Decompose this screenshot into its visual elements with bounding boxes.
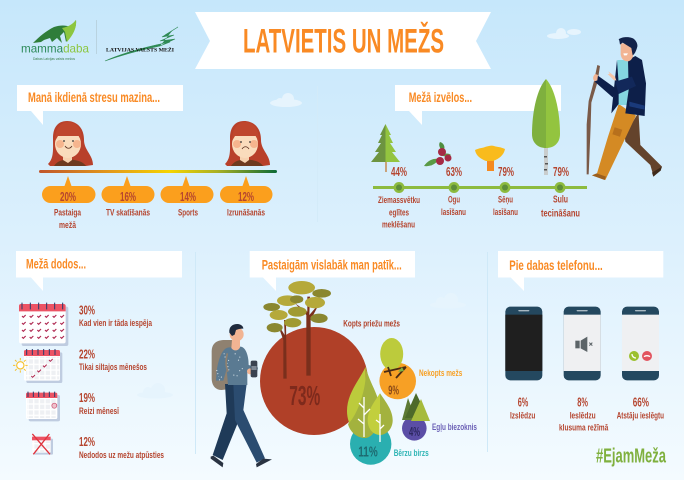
item: izrunāšanās: 12%: [238, 189, 254, 204]
stress scale line: [39, 170, 277, 173]
bubble chart: unmanaged forest 9%: [379, 338, 462, 399]
value: 79% Sēņu lasīšanu: lasīšanu: [493, 207, 518, 218]
item: tv skatīšanās: TV skatīšanās: [106, 208, 150, 219]
logo: Latvijas valsts meži: LATVIJAS VALSTS MEŽI: [106, 48, 174, 54]
bubble chart: spruce thicket 4%: Egļu biezoknis: [432, 422, 477, 433]
value: 79% Sulu tecināšanu: 79%: [553, 164, 569, 179]
stat: 30%: 30%: [79, 303, 95, 318]
illustration: hiker with backpack: [211, 324, 272, 467]
value: 44% Ziemassvētku eglītes meklēšanu: 44%: [391, 164, 407, 179]
stat: 30%: [79, 303, 152, 329]
icon: christmas tree: [371, 124, 400, 172]
item: pastaiga mežā: 20%: [60, 189, 76, 204]
item: izrunāšanās: [220, 176, 272, 219]
stat: 19%: 19%: [79, 390, 95, 405]
panel: stress: [17, 85, 277, 231]
value: 44% Ziemassvētku eglītes meklēšanu: eglītes: [389, 208, 409, 219]
heading bubble: phone: [498, 251, 663, 291]
icon: calendar with sun: [13, 349, 62, 383]
bubble chart: pine forest 73%: [260, 281, 400, 435]
stat: 6%: Izslēdzu: [510, 411, 535, 422]
icon: happy woman: [48, 121, 93, 166]
stat: 8%: 8%: [577, 395, 588, 410]
logo: mammadaba: Dabas Latvijas valsts mežos: [33, 57, 75, 61]
logo: mammadaba: [21, 20, 89, 61]
logo: mammadaba: mammadaba: [21, 42, 89, 56]
value: 44% Ziemassvētku eglītes meklēšanu: meklēšanu: [382, 220, 415, 230]
value: 63% Ogu lasīšanu: lasīšanu: [441, 207, 466, 218]
value: 63% Ogu lasīšanu: [441, 164, 466, 218]
stat: 19%: Reizi mēnesī: [79, 406, 119, 417]
item: pastaiga mežā: Pastaiga: [54, 208, 81, 219]
icon: crossed calendar: [32, 434, 53, 455]
item: sports: 14%: [180, 189, 196, 204]
bubble chart: pine forest 73%: Kopts priežu mežs: [343, 319, 400, 330]
panel: favourite forests: [250, 251, 477, 465]
icon: calendar with one mark: [26, 392, 60, 421]
stat: 22%: 22%: [79, 347, 95, 362]
stat: 6%: [510, 395, 535, 422]
stat: 6%: 6%: [518, 395, 529, 410]
item: tv skatīšanās: 16%: [120, 189, 136, 204]
item: pastaiga mežā: [42, 176, 96, 231]
cloud: centre: [430, 293, 466, 308]
stat: 8%: Ieslēdzu: [570, 411, 596, 422]
heading bubble: how often: Mežā dodos...: [26, 256, 86, 272]
icon: calendar full of checks: [19, 303, 68, 346]
cloud: top right: [547, 28, 581, 39]
icon: birch tree: [532, 79, 560, 175]
icon: phone off: [505, 307, 542, 380]
bubble chart: unmanaged forest 9%: Nekopts mežs: [419, 368, 462, 379]
value: 63% Ogu lasīšanu: Ogu: [448, 194, 460, 206]
value: 79% Sēņu lasīšanu: Sēņu: [498, 194, 513, 206]
title banner: [195, 12, 491, 69]
item: pastaiga mežā: mežā: [59, 220, 77, 231]
value: 79% Sēņu lasīšanu: [493, 164, 518, 218]
heading bubble: activities: Mežā izvēlos...: [409, 89, 472, 105]
stat: 12%: Nedodos uz mežu atpūsties: [79, 450, 164, 461]
value: 79% Sēņu lasīšanu: 79%: [498, 164, 514, 179]
cloud: top left: [270, 93, 302, 107]
bubble chart: birch grove 11%: [347, 367, 429, 465]
title banner: LATVIETIS UN MEŽS: [243, 22, 444, 60]
item: tv skatīšanās: [102, 176, 154, 219]
heading bubble: activities: [395, 85, 561, 125]
bubble chart: pine forest 73%: 73%: [289, 380, 320, 411]
stat: 22%: [79, 347, 147, 373]
value: 79% Sulu tecināšanu: Sulu: [553, 194, 568, 206]
item: sports: [160, 176, 214, 219]
timeline: [373, 182, 587, 193]
heading bubble: favourite forests: [250, 251, 415, 291]
logo: Latvijas valsts meži: [105, 27, 178, 61]
panel: forest activities: [371, 79, 587, 230]
stat: 22%: Tikai siltajos mēnešos: [79, 362, 147, 373]
bubble chart: unmanaged forest 9%: 9%: [388, 382, 399, 397]
icon: phone on: [622, 307, 659, 380]
value: 44% Ziemassvētku eglītes meklēšanu: Ziemassvētku: [378, 195, 420, 206]
icon: phone silent: [564, 307, 601, 380]
stat: 66%: [617, 395, 664, 422]
icon: sad woman: [225, 121, 270, 166]
value: 79% Sulu tecināšanu: [541, 164, 580, 220]
heading bubble: stress: Manā ikdienā stresu mazina...: [28, 89, 160, 105]
stat: 8%: klusuma režīmā: [559, 423, 609, 434]
stat: 8%: [559, 395, 609, 434]
stat: 12%: 12%: [79, 434, 95, 449]
heading bubble: how often: [16, 251, 182, 291]
stat: 30%: Kad vien ir tāda iespēja: [79, 318, 152, 329]
item: sports: Sports: [178, 208, 198, 219]
heading bubble: phone: Pie dabas telefonu...: [509, 257, 603, 273]
heading bubble: favourite forests: Pastaigām vislabāk man patīk...: [262, 257, 402, 273]
value: 63% Ogu lasīšanu: 63%: [446, 164, 462, 179]
heading bubble: stress: [17, 85, 183, 125]
stat: 66%: 66%: [633, 395, 649, 410]
stat: 12%: [79, 434, 164, 461]
icon: chanterelle: [475, 146, 505, 171]
icon: berries: [424, 142, 452, 166]
illustration: hiker with staff: [587, 37, 662, 180]
bubble chart: spruce thicket 4%: 4%: [409, 424, 420, 439]
item: izrunāšanās: Izrunāšanās: [227, 208, 265, 219]
bubble chart: birch grove 11%: 11%: [358, 444, 378, 461]
value: 79% Sulu tecināšanu: tecināšanu: [541, 208, 580, 220]
panel: how often: [13, 251, 182, 461]
stat: 19%: [79, 390, 119, 417]
bubble chart: birch grove 11%: Bērzu birzs: [394, 448, 429, 459]
bubble chart: spruce thicket 4%: [402, 393, 477, 441]
cloud: bottom left: [137, 383, 173, 398]
value: 44% Ziemassvētku eglītes meklēšanu: [378, 164, 420, 230]
panel: phone: [498, 251, 664, 434]
